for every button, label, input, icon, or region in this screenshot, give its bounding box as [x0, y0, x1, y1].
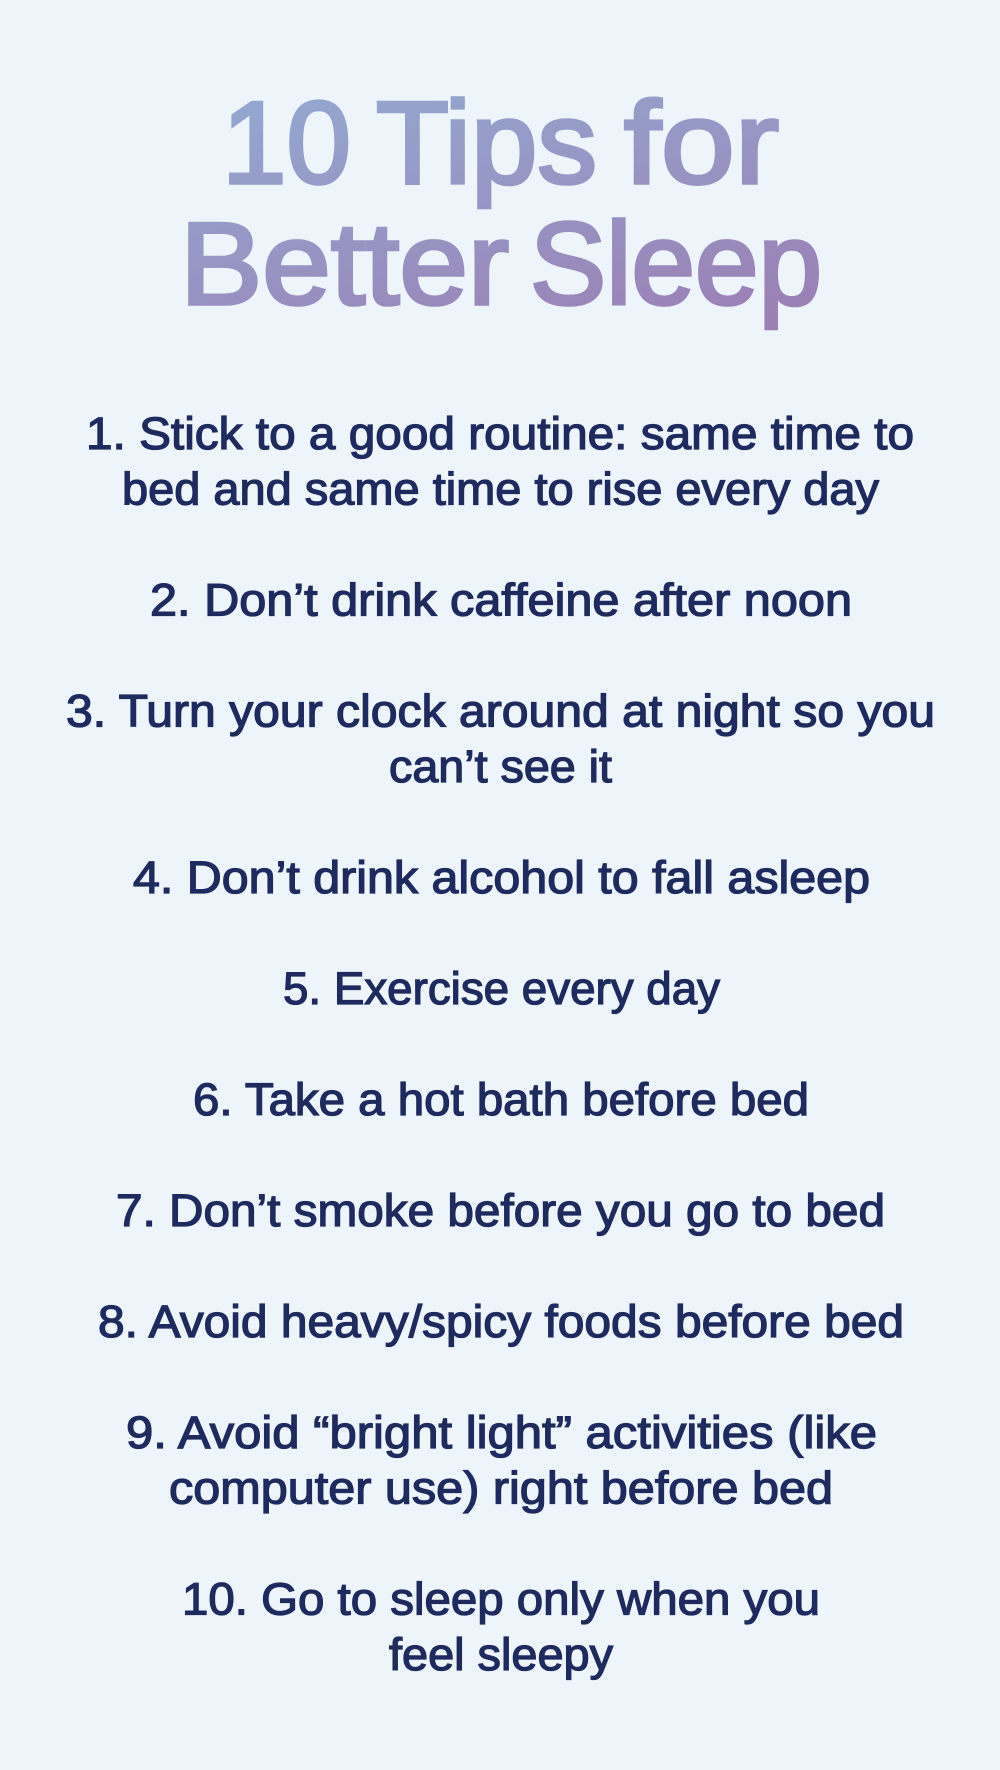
tip 3	[66, 686, 935, 792]
title line 1: for	[624, 77, 779, 208]
tip 8: 8. Avoid heavy/spicy foods before bed	[98, 1296, 904, 1347]
tip 4: 4. Don’t drink alcohol to fall asleep	[133, 852, 870, 903]
title	[180, 77, 822, 329]
tip 1: 1. Stick to a good routine: same time to	[86, 408, 914, 459]
tip 5: 5. Exercise every day	[283, 963, 720, 1014]
tip 10	[182, 1574, 820, 1680]
title line 2	[180, 198, 822, 329]
tip 1	[86, 408, 914, 514]
tip 9: computer use) right before bed	[169, 1462, 833, 1514]
title line 1: 10	[222, 77, 351, 208]
tip 9: 9. Avoid “bright light” activities (like	[126, 1407, 877, 1458]
tip 2: 2. Don’t drink caffeine after noon	[150, 574, 852, 626]
title line 1	[222, 77, 779, 208]
title line 1: Tips	[376, 77, 597, 208]
tip 7: 7. Don’t smoke before you go to bed	[116, 1185, 885, 1236]
title line 2: Sleep	[530, 198, 822, 329]
title line 2: Better	[180, 198, 509, 329]
tip 6: 6. Take a hot bath before bed	[193, 1074, 809, 1125]
tip 1: bed and same time to rise every day	[122, 464, 879, 514]
tips list	[66, 408, 935, 1680]
tip 3: 3. Turn your clock around at night so you	[66, 686, 935, 736]
tip 10: 10. Go to sleep only when you	[182, 1574, 820, 1624]
tip 3: can’t see it	[389, 741, 612, 792]
tip 9	[126, 1407, 877, 1514]
tip 10: feel sleepy	[389, 1629, 613, 1680]
